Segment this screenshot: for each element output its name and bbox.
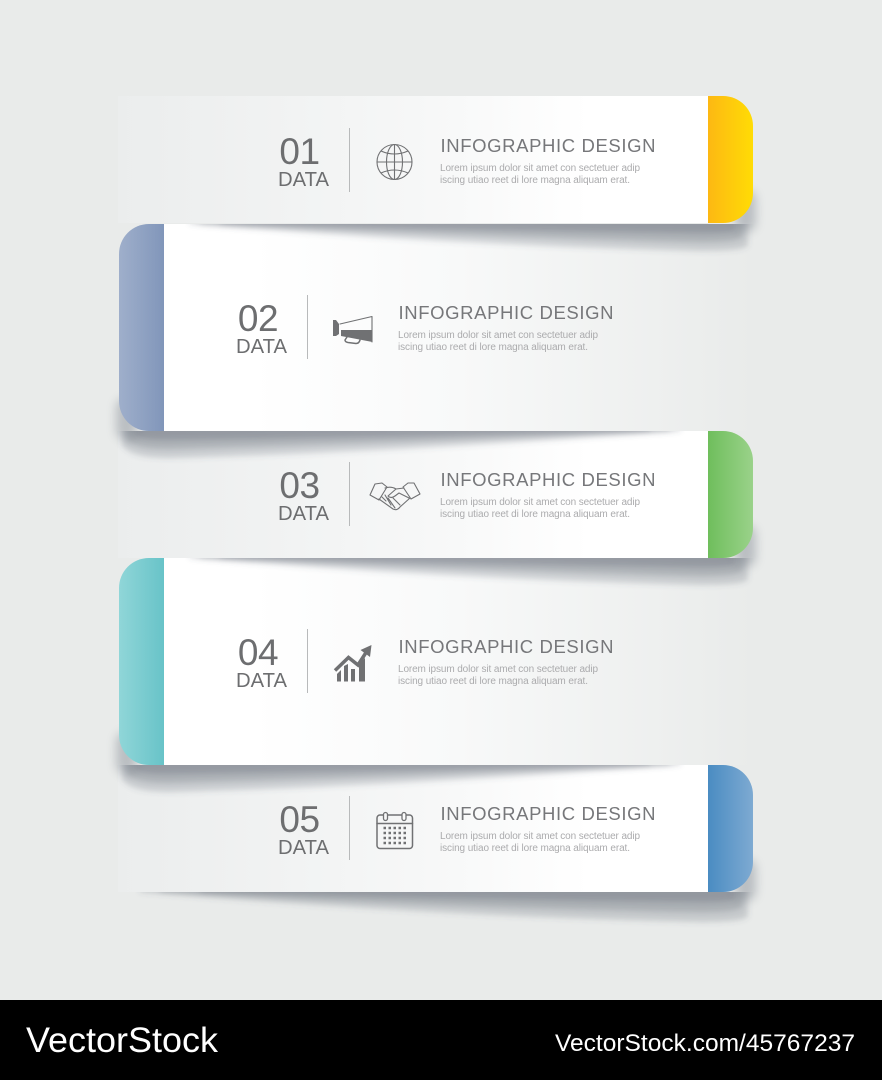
panel: step 01 <box>118 96 708 223</box>
brand name: VectorStock <box>26 1021 219 1060</box>
description <box>440 831 640 854</box>
heading: INFOGRAPHIC DESIGN <box>398 302 614 323</box>
content: step 04 <box>236 629 614 693</box>
description: Lorem ipsum dolor sit amet con sectetuer adip <box>398 330 598 341</box>
panel: step 02 <box>164 224 753 431</box>
shadow under step 05 <box>140 892 750 924</box>
shadow under step 01 <box>188 224 750 253</box>
image reference: VectorStock.com/45767237 <box>555 1030 855 1057</box>
icon: globe <box>377 144 412 180</box>
panel: step 04 <box>164 558 753 765</box>
panel: step 03 <box>118 431 708 558</box>
content: step 01 <box>278 128 656 192</box>
tab: blue <box>708 765 753 892</box>
content: step 03 <box>278 462 656 526</box>
tab: yellow <box>708 96 753 223</box>
number 04: 04 <box>238 632 278 673</box>
icon: megaphone <box>333 316 372 344</box>
number 01: 01 <box>279 131 320 172</box>
shadow under step 03 <box>188 558 750 587</box>
description: iscing utiao reet di lore magna aliquam erat. <box>398 676 588 687</box>
description <box>440 163 640 186</box>
heading: INFOGRAPHIC DESIGN <box>440 135 656 156</box>
footer bar <box>0 1000 882 1080</box>
soft shadows behind rounded tabs <box>116 190 756 901</box>
description: Lorem ipsum dolor sit amet con sectetuer adip <box>440 831 640 842</box>
heading: INFOGRAPHIC DESIGN <box>440 803 656 824</box>
description: iscing utiao reet di lore magna aliquam erat. <box>440 175 630 186</box>
panel: step 05 <box>118 765 708 892</box>
label DATA: DATA <box>278 837 330 859</box>
content: step 05 <box>278 796 656 860</box>
description <box>398 664 598 687</box>
tab: teal <box>119 558 164 765</box>
content: step 02 <box>236 295 614 359</box>
icon: handshake <box>370 483 420 510</box>
description: Lorem ipsum dolor sit amet con sectetuer adip <box>440 497 640 508</box>
icon: growth chart <box>335 645 372 682</box>
number 02: 02 <box>238 298 278 339</box>
number 05: 05 <box>279 799 320 840</box>
description: Lorem ipsum dolor sit amet con sectetuer adip <box>440 163 640 174</box>
description <box>440 497 640 520</box>
heading: INFOGRAPHIC DESIGN <box>440 469 656 490</box>
description: iscing utiao reet di lore magna aliquam erat. <box>440 509 630 520</box>
description: iscing utiao reet di lore magna aliquam erat. <box>398 342 588 353</box>
heading: INFOGRAPHIC DESIGN <box>398 636 614 657</box>
label DATA: DATA <box>278 169 330 191</box>
number 03: 03 <box>279 465 320 506</box>
shadow under step 02 <box>120 431 682 460</box>
tab: green <box>708 431 753 558</box>
description: iscing utiao reet di lore magna aliquam erat. <box>440 843 630 854</box>
label DATA: DATA <box>236 670 288 692</box>
label DATA: DATA <box>278 503 330 525</box>
description: Lorem ipsum dolor sit amet con sectetuer adip <box>398 664 598 675</box>
label DATA: DATA <box>236 336 288 358</box>
tab: slate blue <box>119 224 164 431</box>
shadow under step 04 <box>120 765 682 794</box>
icon: calendar <box>377 812 412 848</box>
description <box>398 330 598 353</box>
